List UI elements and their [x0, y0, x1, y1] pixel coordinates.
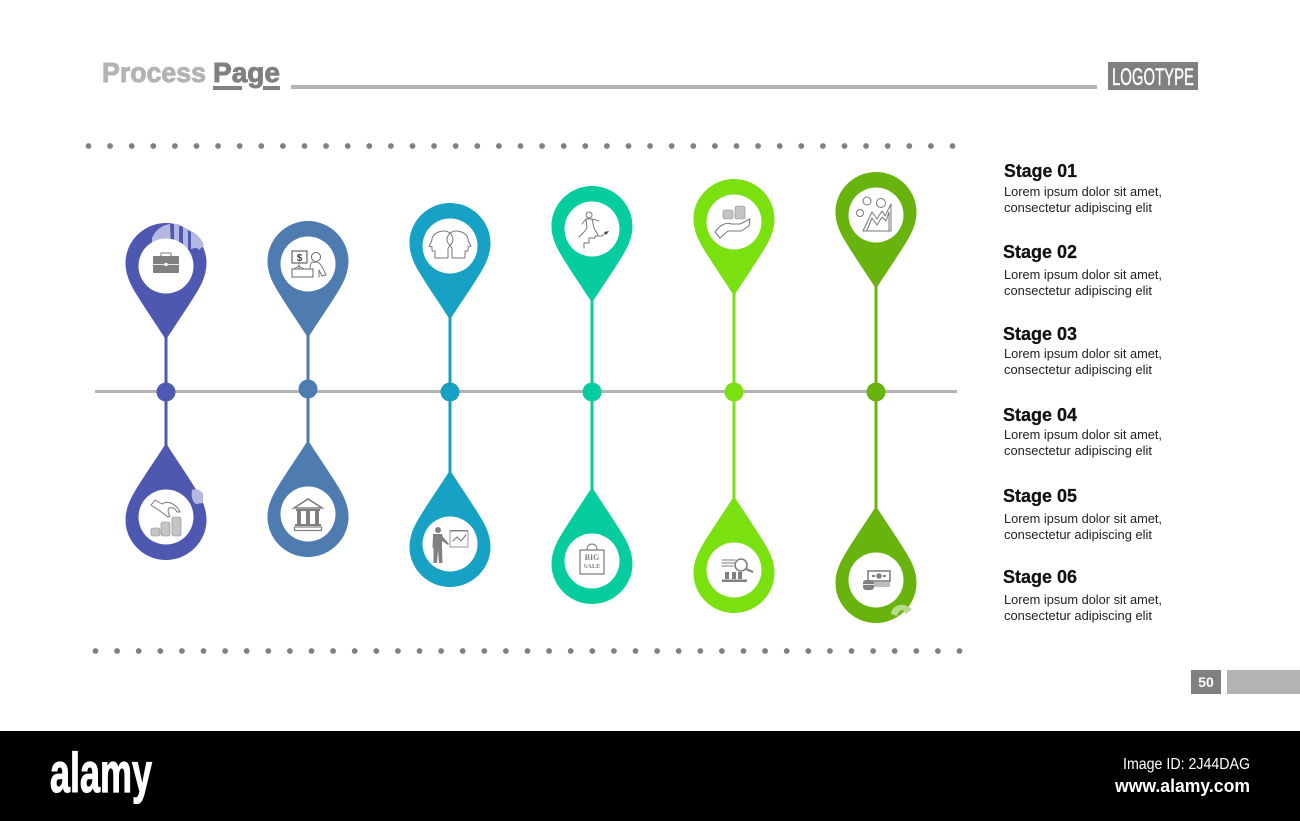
- top pin 2: [268, 221, 348, 338]
- icon: big sale shopping bag: [580, 544, 604, 574]
- icon: hand dropping coins: [151, 500, 181, 536]
- logotype badge: LOGOTYPE: [1112, 64, 1194, 91]
- title: [102, 57, 280, 90]
- stage 02 text: [1003, 242, 1162, 298]
- stage 06 text: [1003, 567, 1162, 623]
- icon: briefcase: [153, 253, 179, 273]
- watermark fragment: [152, 224, 204, 251]
- top pin 3: [410, 203, 490, 320]
- icon: bank building: [294, 499, 322, 530]
- stage 02 text: Stage 02: [1003, 242, 1077, 262]
- top pin 5: [694, 179, 774, 296]
- watermark fragment: [891, 605, 912, 616]
- bottom drop 5: [694, 496, 774, 613]
- stage 04 text: Stage 04: [1003, 405, 1077, 425]
- stage legend: [1003, 161, 1162, 623]
- title: Page: [213, 57, 280, 88]
- stage column 5: [694, 179, 774, 613]
- stage column 2: [268, 221, 348, 557]
- top pin 1: [126, 223, 206, 340]
- page number: 50: [1198, 674, 1214, 690]
- stage 03 text: Lorem ipsum dolor sit amet,: [1004, 346, 1162, 361]
- stage column 6: [836, 172, 916, 623]
- stage 06 text: Lorem ipsum dolor sit amet,: [1004, 592, 1162, 607]
- icon: cashier with money display: $: [297, 253, 303, 264]
- stage 05 text: consectetur adipiscing elit: [1004, 527, 1152, 542]
- stage 06 text: Stage 06: [1003, 567, 1077, 587]
- bottom drop 1: [126, 443, 206, 560]
- stage 04 text: [1003, 405, 1162, 458]
- stage 01 text: [1004, 161, 1162, 215]
- stage 01 text: Lorem ipsum dolor sit amet,: [1004, 184, 1162, 199]
- bottom drop 6: [836, 506, 916, 623]
- alamy logo: alamy: [50, 741, 152, 804]
- bottom drop 4: [552, 487, 632, 604]
- stage 05 text: [1003, 486, 1162, 542]
- icon: two heads facing each other: [429, 231, 471, 258]
- watermark fragment: [192, 489, 203, 504]
- stage 06 text: consectetur adipiscing elit: [1004, 608, 1152, 623]
- bottom drop 2: [268, 440, 348, 557]
- icon: big sale shopping bag: BIG: [585, 553, 599, 562]
- title: Process: [102, 57, 206, 88]
- footer bar: [0, 731, 1300, 821]
- bottom drop 3: [410, 470, 490, 587]
- stage 03 text: consectetur adipiscing elit: [1004, 362, 1152, 377]
- icon: man running up stairs: [579, 212, 609, 248]
- icon: presenter with chart: [432, 527, 468, 563]
- stage 02 text: Lorem ipsum dolor sit amet,: [1004, 267, 1162, 282]
- icon: bar chart with magnifier: [722, 559, 753, 582]
- stage 01 text: consectetur adipiscing elit: [1004, 200, 1152, 215]
- icon: banknotes and coins: [863, 571, 890, 590]
- icon: big sale shopping bag: SALE: [584, 563, 600, 570]
- stage 04 text: Lorem ipsum dolor sit amet,: [1004, 427, 1162, 442]
- icon: hand holding coins: [715, 206, 750, 238]
- icon: currency chart: [856, 197, 891, 231]
- logotype badge: [1108, 62, 1198, 91]
- stage 04 text: consectetur adipiscing elit: [1004, 443, 1152, 458]
- stage column 4: [552, 186, 632, 604]
- stage 05 text: Stage 05: [1003, 486, 1077, 506]
- stage 02 text: consectetur adipiscing elit: [1004, 283, 1152, 298]
- top pin 6: [836, 172, 916, 289]
- stage 03 text: Stage 03: [1003, 324, 1077, 344]
- timeline axis: [95, 390, 957, 393]
- stage column 3: [410, 203, 490, 587]
- stage column 1: [126, 223, 206, 560]
- page number: [1191, 670, 1300, 694]
- stage 01 text: Stage 01: [1004, 161, 1077, 181]
- image id: Image ID: 2J44DAG: [1123, 756, 1250, 773]
- stage 05 text: Lorem ipsum dolor sit amet,: [1004, 511, 1162, 526]
- stage 03 text: [1003, 324, 1162, 377]
- top pin 4: [552, 186, 632, 303]
- website: www.alamy.com: [1114, 776, 1250, 796]
